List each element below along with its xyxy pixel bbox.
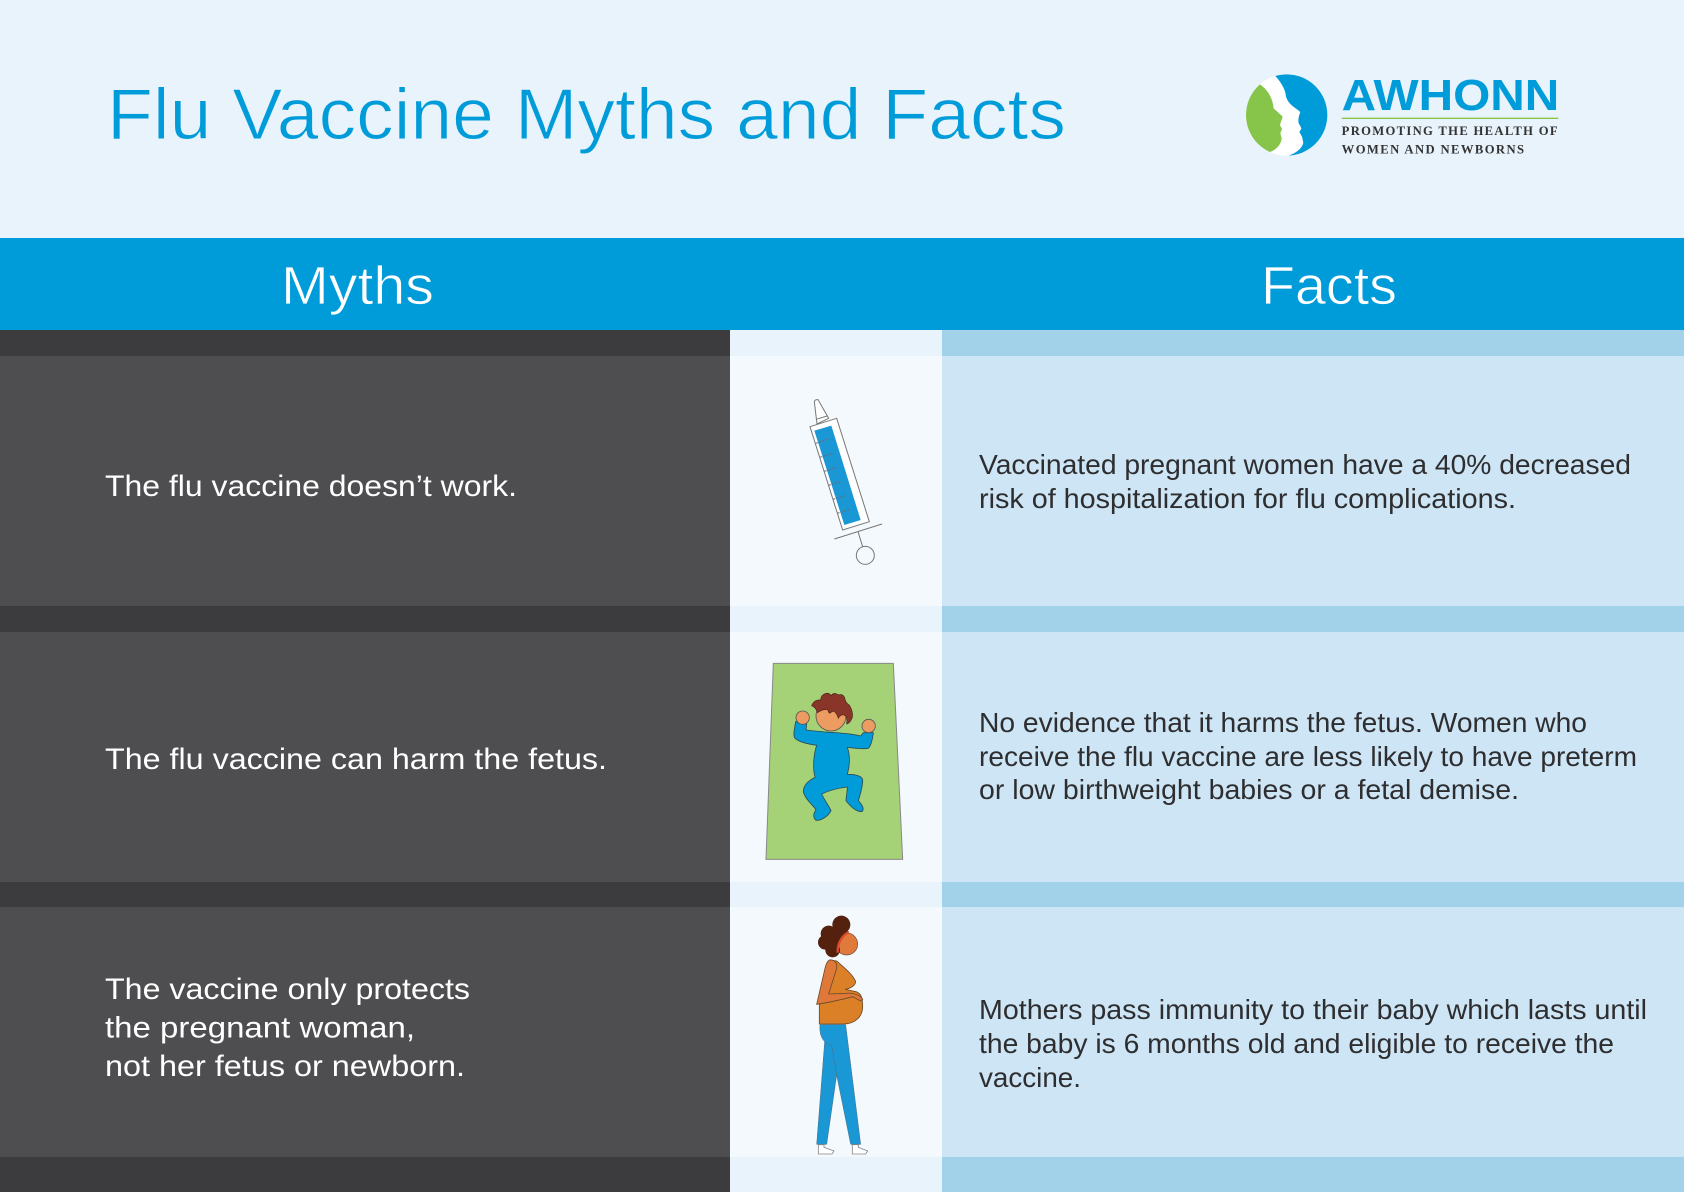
logo: AWHONN: PROMOTING THE HEALTH OF	[1342, 124, 1558, 138]
fact 1 text: risk of hospitalization for flu complications.	[979, 483, 1516, 514]
myth 3 text: not her fetus or newborn.	[105, 1050, 465, 1083]
fact 1 text: Vaccinated pregnant women have a 40% decreased	[979, 449, 1631, 480]
myth 1 text: The flu vaccine doesn’t work.	[105, 470, 517, 503]
heading: Facts: Facts	[1261, 256, 1397, 316]
fact 3 text: vaccine.	[979, 1062, 1081, 1093]
logo: AWHONN	[1246, 74, 1558, 156]
myth 2 text: The flu vaccine can harm the fetus.	[105, 743, 607, 776]
myths column background	[0, 330, 730, 1192]
fact 2 text: receive the flu vaccine are less likely to have preterm	[979, 741, 1637, 772]
fact 3 text: Mothers pass immunity to their baby which lasts until	[979, 994, 1647, 1025]
heading: Myths: Myths	[281, 256, 434, 316]
fact 1 text	[979, 449, 1631, 514]
fact 2 text	[979, 707, 1637, 805]
fact 2 text: or low birthweight babies or a fetal demise.	[979, 774, 1519, 805]
title: Flu Vaccine Myths and Facts	[107, 75, 1066, 155]
fact 3 text	[979, 994, 1647, 1093]
fact 2 text: No evidence that it harms the fetus. Women who	[979, 707, 1587, 738]
logo: AWHONN: AWHONN	[1342, 71, 1559, 120]
icon: syringe	[810, 400, 882, 564]
logo: AWHONN: WOMEN AND NEWBORNS	[1342, 142, 1524, 156]
icon: baby on green blanket	[766, 663, 903, 859]
myth 3 text: The vaccine only protects	[105, 973, 470, 1006]
icon column background	[730, 330, 942, 1192]
column header bar	[0, 238, 1684, 330]
fact 3 text: the baby is 6 months old and eligible to receive the	[979, 1028, 1614, 1059]
header panel	[0, 0, 1684, 238]
myth 3 text	[105, 973, 470, 1083]
icon: pregnant woman	[817, 916, 868, 1154]
facts column background	[942, 330, 1684, 1192]
myth 3 text: the pregnant woman,	[105, 1012, 415, 1044]
